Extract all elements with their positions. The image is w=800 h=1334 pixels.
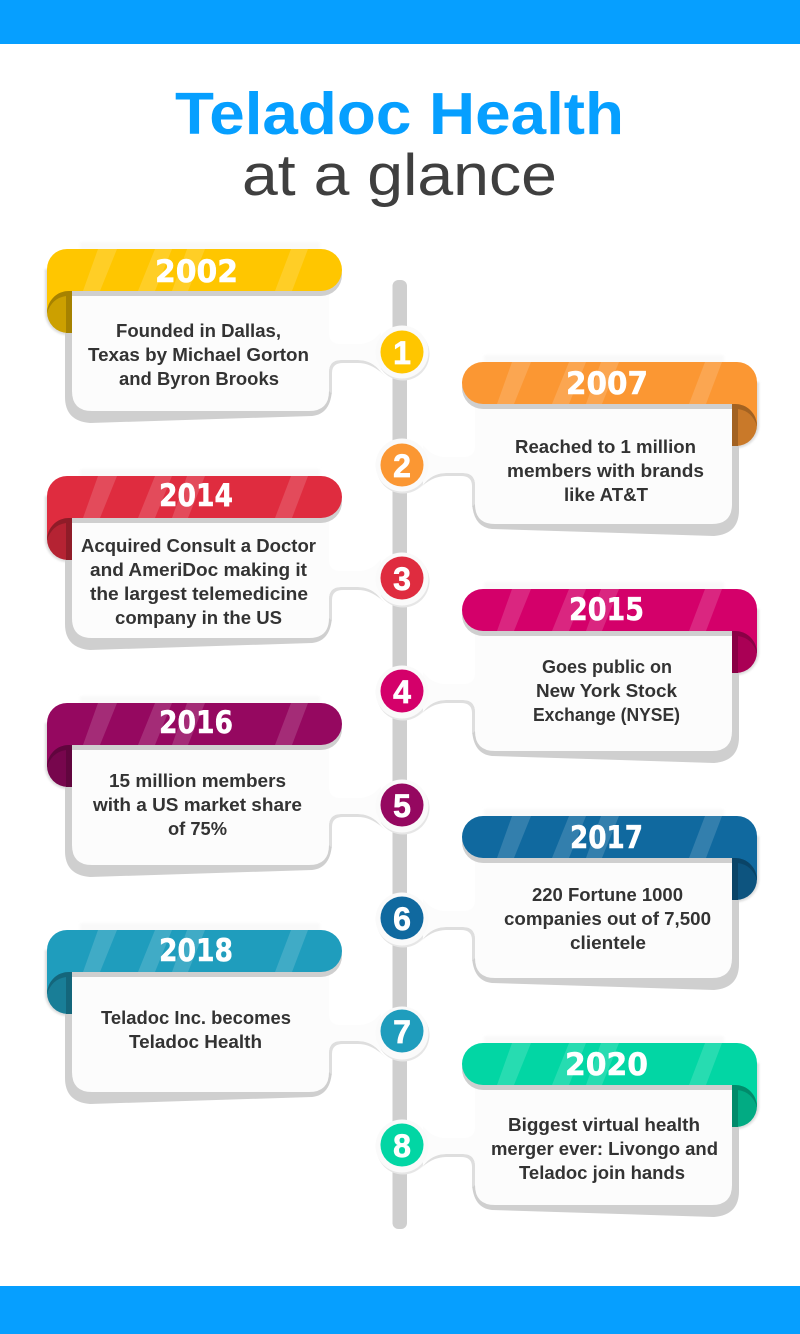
description bbox=[533, 657, 680, 725]
milestone 8: 2020 bbox=[376, 1036, 759, 1217]
card shape bbox=[45, 696, 430, 877]
milestone 4: 2015 bbox=[376, 582, 759, 763]
description: the largest telemedicine bbox=[90, 584, 308, 604]
description bbox=[101, 1008, 291, 1052]
milestone 2: 2007 bbox=[376, 355, 759, 536]
milestone 3: 2014 bbox=[45, 469, 430, 650]
banner stripes bbox=[83, 703, 308, 745]
number badge bbox=[380, 784, 424, 826]
year: 2002 bbox=[155, 254, 238, 290]
title line 1: Teladoc Health bbox=[175, 81, 624, 147]
number badge: 1 bbox=[393, 335, 411, 371]
description: Reached to 1 million bbox=[515, 437, 696, 457]
year: 2020 bbox=[565, 1047, 648, 1083]
description: Biggest virtual health bbox=[508, 1115, 700, 1135]
number badge: 5 bbox=[393, 788, 411, 824]
year: 2017 bbox=[570, 820, 643, 856]
card shape bbox=[376, 1036, 759, 1217]
description bbox=[81, 536, 316, 628]
description: members with brands bbox=[507, 461, 704, 481]
description: Founded in Dallas, bbox=[116, 321, 281, 341]
card shape bbox=[376, 809, 759, 990]
title bbox=[175, 81, 624, 208]
description: 15 million members bbox=[109, 771, 286, 791]
banner stripes bbox=[83, 930, 308, 972]
description bbox=[92, 771, 302, 839]
number badge bbox=[380, 670, 424, 712]
description: and AmeriDoc making it bbox=[90, 560, 307, 580]
number badge bbox=[380, 1124, 424, 1166]
card shape bbox=[376, 355, 759, 536]
milestone 5: 2016 bbox=[45, 696, 430, 877]
card shape bbox=[376, 582, 759, 763]
milestone 1: 2002 bbox=[45, 242, 430, 423]
description: Goes public on bbox=[542, 657, 672, 677]
number badge: 2 bbox=[393, 448, 411, 484]
banner stripes bbox=[497, 589, 722, 631]
number badge: 3 bbox=[393, 561, 411, 597]
number badge: 4 bbox=[393, 674, 411, 710]
description bbox=[507, 437, 704, 505]
description: clientele bbox=[570, 933, 646, 953]
description: of 75% bbox=[168, 819, 227, 839]
year: 2007 bbox=[566, 366, 648, 402]
banner stripes bbox=[83, 476, 308, 518]
description: Acquired Consult a Doctor bbox=[81, 536, 316, 556]
number badge bbox=[380, 556, 424, 600]
number badge bbox=[380, 896, 424, 940]
description: New York Stock bbox=[536, 681, 678, 701]
number badge bbox=[380, 1010, 424, 1052]
description: 220 Fortune 1000 bbox=[532, 885, 683, 905]
description: and Byron Brooks bbox=[119, 369, 279, 389]
milestone 7: 2018 bbox=[45, 923, 430, 1104]
card shape bbox=[45, 242, 430, 423]
description: company in the US bbox=[115, 608, 282, 628]
description: like AT&T bbox=[564, 485, 648, 505]
number badge: 7 bbox=[393, 1014, 411, 1050]
year: 2016 bbox=[159, 705, 233, 741]
number badge bbox=[380, 330, 424, 374]
banner stripes bbox=[83, 249, 308, 291]
top band bbox=[0, 0, 800, 44]
description bbox=[88, 321, 309, 389]
number badge: 8 bbox=[393, 1128, 411, 1164]
description: Exchange (NYSE) bbox=[533, 705, 680, 725]
description: Teladoc Health bbox=[129, 1032, 262, 1052]
description: merger ever: Livongo and bbox=[491, 1139, 718, 1159]
card shape bbox=[45, 923, 430, 1104]
banner stripes bbox=[497, 362, 722, 404]
timeline bar bbox=[392, 280, 407, 1229]
banner stripes bbox=[497, 816, 722, 858]
banner stripes bbox=[497, 1043, 722, 1085]
number badge bbox=[380, 444, 424, 486]
year: 2014 bbox=[159, 478, 233, 514]
year: 2018 bbox=[159, 933, 233, 969]
description: Texas by Michael Gorton bbox=[88, 345, 309, 365]
number badge: 6 bbox=[393, 901, 411, 937]
year: 2015 bbox=[569, 592, 644, 628]
description bbox=[491, 1115, 718, 1183]
description: Teladoc join hands bbox=[519, 1163, 685, 1183]
milestone 6: 2017 bbox=[376, 809, 759, 990]
description bbox=[504, 885, 711, 953]
title line 2: at a glance bbox=[242, 143, 557, 208]
description: companies out of 7,500 bbox=[504, 909, 711, 929]
description: with a US market share bbox=[92, 795, 302, 815]
bottom band bbox=[0, 1286, 800, 1334]
description: Teladoc Inc. becomes bbox=[101, 1008, 291, 1028]
card shape bbox=[45, 469, 430, 650]
